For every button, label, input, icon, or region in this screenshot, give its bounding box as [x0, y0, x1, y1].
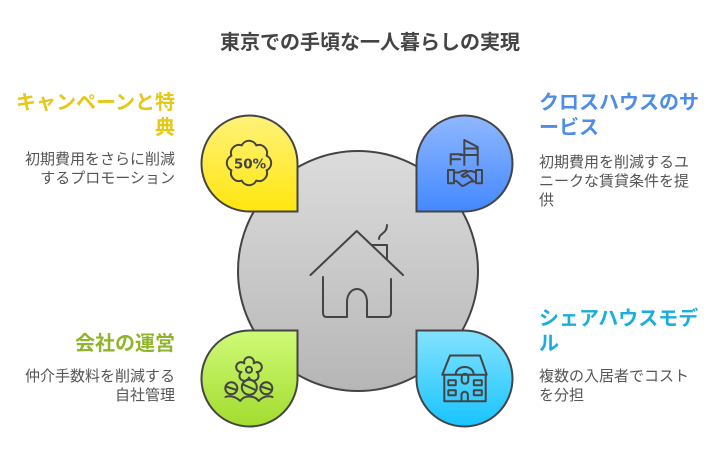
- green badge: [202, 330, 298, 426]
- heading: シェアハウスモデ: [539, 306, 698, 330]
- panel: cross house service: [416, 91, 699, 212]
- cyan badge: [416, 330, 512, 426]
- icon: house: [310, 225, 403, 317]
- body text: 初期費用をさらに削減: [25, 151, 175, 168]
- body text: 複数の入居者でコスト: [539, 368, 689, 385]
- heading: ル: [539, 333, 559, 355]
- body text: 自社管理: [115, 386, 175, 404]
- panel: company operation: [25, 330, 298, 426]
- icon: gear and people: [225, 357, 272, 401]
- heading: クロスハウスのサ: [539, 91, 699, 114]
- heading: ービス: [539, 116, 599, 139]
- icon: 50 percent badge: [227, 141, 271, 185]
- body text: ニークな賃貸条件を提: [539, 173, 689, 190]
- yellow badge: [202, 116, 298, 212]
- panel: share house: [416, 306, 698, 426]
- body text: 供: [539, 192, 554, 209]
- blue badge: [416, 116, 512, 212]
- title: 東京での手頃な一人暮らしの実現: [220, 31, 520, 54]
- body text: を分担: [539, 387, 584, 404]
- central circle with house: [238, 151, 478, 391]
- heading: キャンペーンと特: [16, 91, 175, 114]
- body text: するプロモーション: [40, 170, 175, 187]
- body text: 仲介手数料を削減する: [25, 368, 175, 385]
- heading: 会社の運営: [75, 332, 175, 355]
- panel: campaign: [16, 91, 298, 212]
- body text: 初期費用を削減するユ: [539, 154, 689, 171]
- icon: mansion: [442, 356, 487, 401]
- icon: buildings and handshake: [448, 140, 482, 186]
- heading: 典: [155, 116, 175, 139]
- icon: 50 percent badge: 50%: [234, 156, 267, 172]
